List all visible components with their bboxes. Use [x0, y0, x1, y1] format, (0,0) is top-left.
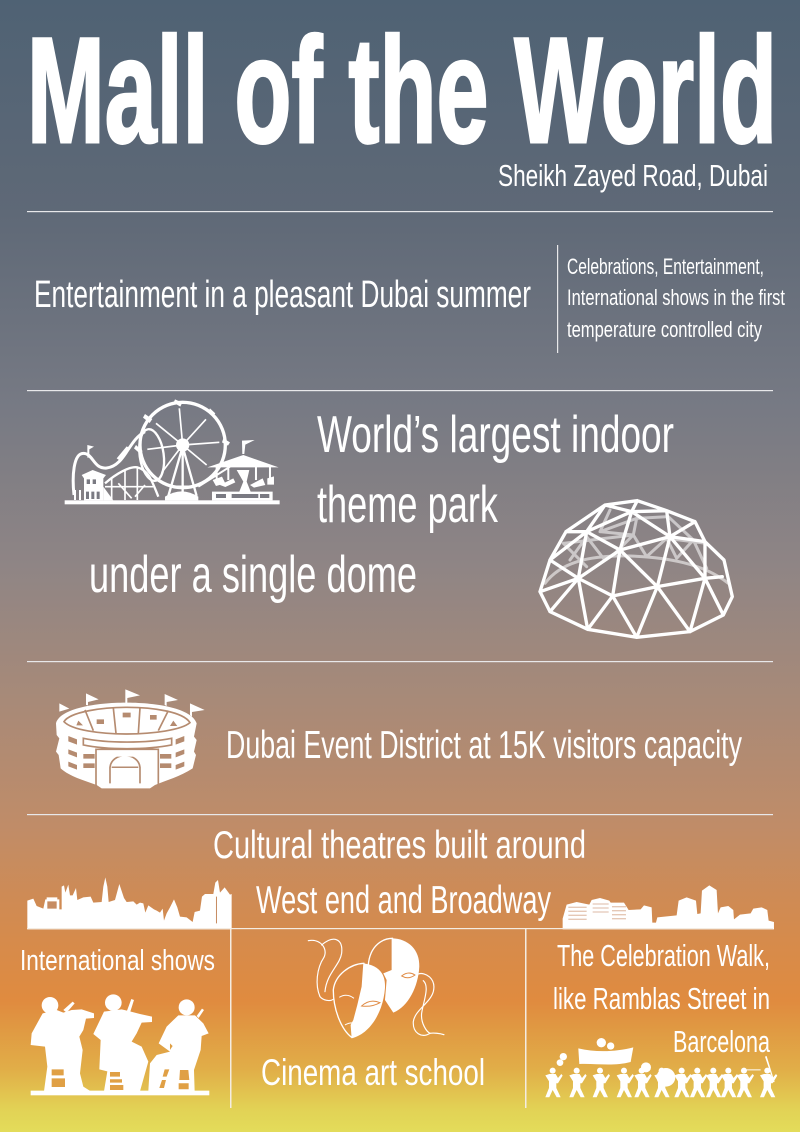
heading: entertainment: Entertainment in a pleasant Dubai summer — [34, 274, 531, 316]
heading: indoor theme park: under a single dome — [89, 546, 417, 604]
icon: theatre masks — [308, 938, 444, 1038]
icon: London skyline — [27, 877, 232, 929]
icon: Broadway skyline — [563, 885, 774, 929]
text block: celebrations — [567, 254, 785, 342]
icon: string trio — [31, 994, 209, 1095]
caption: international shows: International shows — [20, 945, 215, 977]
caption: cinema art school: Cinema art school — [261, 1052, 485, 1093]
icon: geodesic dome — [540, 501, 732, 637]
icon: theme park — [65, 399, 280, 504]
text block: celebration walk — [553, 938, 771, 1059]
heading: indoor theme park: theme park — [317, 476, 499, 534]
heading: cultural theatres: Cultural theatres built around — [213, 824, 586, 867]
heading: indoor theme park — [89, 406, 674, 604]
heading: cultural theatres — [213, 824, 586, 922]
icon: parade — [545, 1038, 777, 1097]
heading: cultural theatres: West end and Broadway — [256, 879, 551, 922]
icon: stadium — [56, 689, 205, 788]
